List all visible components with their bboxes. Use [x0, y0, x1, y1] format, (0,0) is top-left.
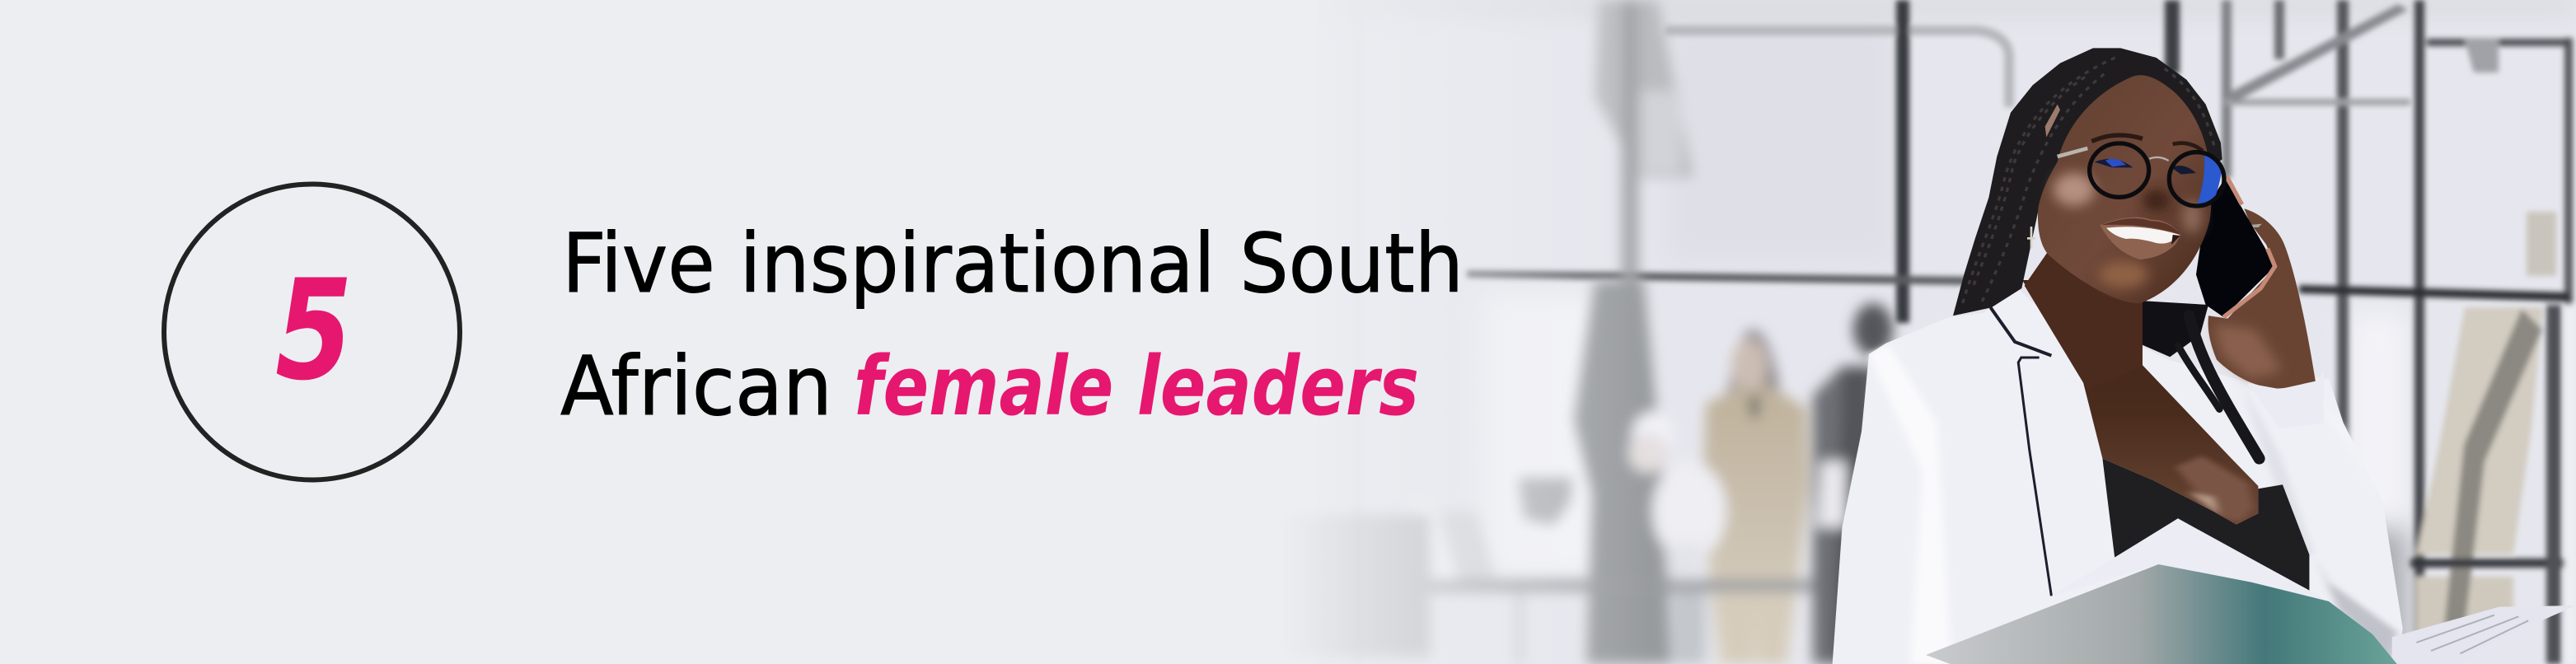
neck and chest [2022, 280, 2258, 525]
eyebrows [2091, 135, 2143, 142]
woman [1833, 48, 2576, 664]
photo: blurred office background [1236, 0, 2576, 664]
phone [2196, 179, 2275, 317]
hand [2208, 208, 2316, 389]
braids over lapel [2178, 316, 2260, 459]
grey block bottom left [1277, 515, 1430, 657]
person in tan coat [1727, 330, 1780, 412]
jacket shading [1869, 344, 1951, 664]
lens reflection [2198, 155, 2222, 204]
neck [2025, 250, 2143, 390]
face [2038, 75, 2211, 303]
central column [1622, 0, 1638, 280]
heading [560, 217, 1464, 434]
hand, phone, hair and face [1953, 48, 2324, 459]
blurred lamp, column and people [1409, 0, 1893, 664]
teeth [2106, 227, 2180, 244]
soft large tones [1318, 0, 2576, 664]
distant person [1853, 303, 1893, 356]
left fade over photo [1236, 0, 1648, 664]
lips [2100, 217, 2181, 260]
number: 5 [275, 250, 353, 411]
folder cover [1926, 564, 2397, 664]
glasses [2058, 143, 2224, 206]
heading highlight: female leaders [854, 339, 1419, 434]
scalp parting [2045, 105, 2060, 138]
black top [2102, 459, 2309, 591]
white folder page [2051, 518, 2329, 601]
cuff [2247, 371, 2324, 428]
braid texture [1961, 58, 2214, 307]
folder [1926, 518, 2576, 664]
heading line 1: Five inspirational South [562, 217, 1464, 311]
hair [1953, 48, 2222, 316]
jacket [1833, 288, 2403, 664]
cheek highlight [2054, 173, 2095, 206]
railing [1417, 580, 1821, 592]
circle [164, 185, 460, 479]
loose pages [2392, 606, 2576, 664]
crisp window frames [1352, 0, 2576, 664]
earring [2027, 227, 2035, 249]
blossoms and table [1632, 412, 1673, 461]
number badge [164, 185, 460, 479]
heading line 2: African [560, 339, 832, 434]
pendant lamp [1595, 0, 1693, 177]
hair under chin [2138, 301, 2208, 357]
eyes [2095, 159, 2133, 167]
jacket lapel piping [1991, 307, 2051, 356]
